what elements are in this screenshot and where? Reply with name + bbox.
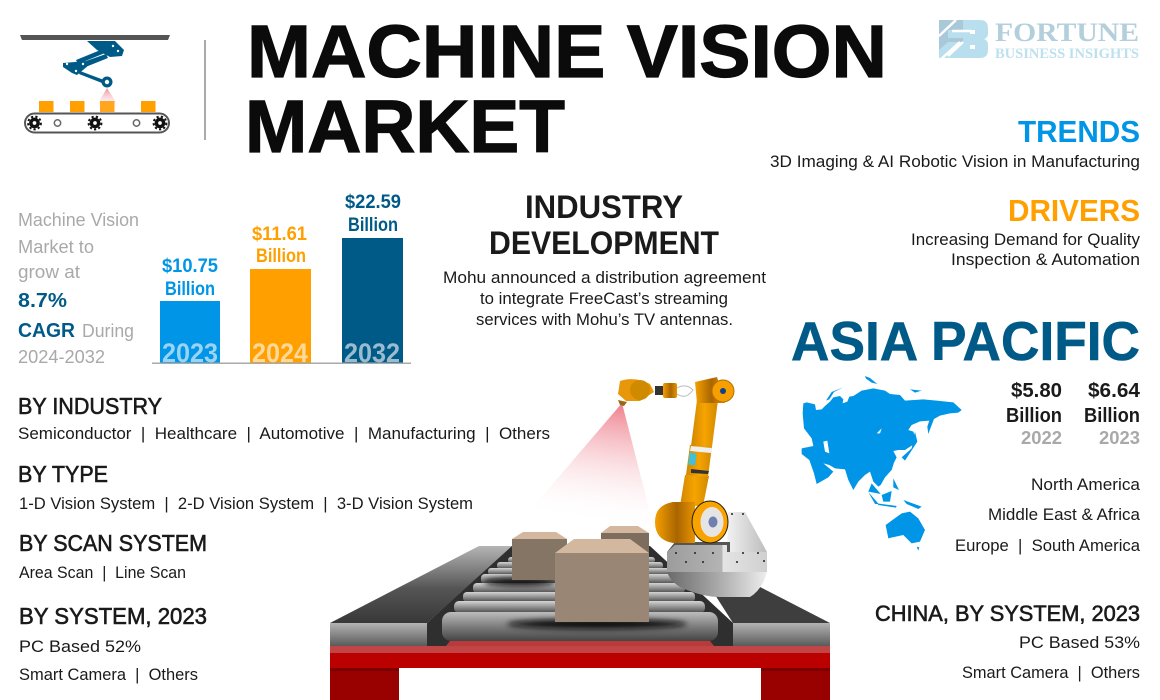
drivers [911,193,1140,269]
segment: by industry: BY INDUSTRY [18,393,162,419]
heading: Asia Pacific: ASIA PACIFIC [791,310,1140,372]
bar 2023: Billion [165,279,215,300]
robot arm [618,377,734,543]
industry development [443,189,766,329]
robot base [667,512,767,597]
title: MARKET [245,85,565,168]
other regions [955,475,1141,555]
CAGR text [18,210,139,367]
bar 2023: $10.75 [162,256,218,277]
other regions: North America [1031,475,1141,494]
segment: by scan system: BY SCAN SYSTEM [19,530,207,556]
bar 2024: $11.61 [252,224,307,245]
CAGR text: grow at [18,262,80,282]
trends [770,114,1140,171]
conveyor [330,546,830,646]
CAGR text: Market to [18,237,94,257]
bar 2024: 2024 [252,338,308,368]
bar 2023: 2023 [162,338,218,368]
regional values: 2023 [1099,428,1140,448]
map: Asia Pacific [802,376,962,551]
other regions: Middle East & Africa [988,505,1141,524]
trends: 3D Imaging & AI Robotic Vision in Manufacturing [770,152,1140,171]
segment: by type: BY TYPE [18,461,108,487]
bar 2032: Billion [348,215,398,236]
segment: by type [18,461,473,513]
segment: by scan system: Area Scan | Line Scan [19,563,186,582]
china by system [875,601,1140,682]
drivers: DRIVERS [1008,193,1140,228]
illustration: conveyor with robot arm [330,377,830,700]
regional values: $6.64 [1088,380,1141,402]
china by system: Smart Camera | Others [962,663,1140,682]
china by system: CHINA, BY SYSTEM, 2023 [875,601,1140,626]
segment: by industry [18,393,550,443]
regional values: Billion [1006,405,1062,427]
segment: by system: Smart Camera | Others [19,665,198,684]
trends: TRENDS [1018,114,1140,149]
bar 2032: $22.59 [345,192,401,213]
other regions: Europe | South America [955,536,1141,555]
segment: by industry: Semiconductor | Healthcare | Automotive | Manufacturing | Others [18,424,550,443]
industry development: Mohu announced a distribution agreement [443,268,766,287]
industry development: services with Mohu’s TV antennas. [476,310,733,329]
segment: by system [19,603,207,684]
CAGR text: During [82,321,134,341]
CAGR text: Machine Vision [18,210,139,230]
bar chart [152,192,411,368]
table frame [330,641,830,700]
logo: Fortune Business Insights: BUSINESS INSIGHTS [995,46,1139,62]
icon: robotic arm over conveyor [20,35,170,132]
drivers: Inspection & Automation [951,250,1140,269]
bar 2032: 2032 [344,338,400,368]
bar 2024 [250,224,311,368]
regional values: Billion [1084,405,1140,427]
regional values: 2022 [1021,428,1062,448]
china by system: PC Based 53% [1019,633,1140,652]
segment: by scan system [19,530,207,582]
segment: by type: 1-D Vision System | 2-D Vision System | 3-D Vision System [19,494,473,513]
logo: Fortune Business Insights [939,18,1139,62]
bar 2023 [160,256,220,368]
vision light cone [522,403,657,540]
regional values: $5.80 [1011,380,1062,402]
CAGR text: 2024-2032 [18,347,105,367]
logo: Fortune Business Insights: FORTUNE [995,18,1139,47]
CAGR text: CAGR [18,320,76,342]
segment: by system: BY SYSTEM, 2023 [19,603,207,629]
bar 2032 [342,192,403,368]
bar 2024: Billion [256,246,306,267]
boxes [512,526,649,622]
industry development: to integrate FreeCast’s streaming [480,289,728,308]
industry development: DEVELOPMENT [489,225,719,261]
CAGR text: 8.7% [18,290,67,312]
industry development: INDUSTRY [525,189,683,225]
drivers: Increasing Demand for Quality [911,230,1140,249]
title [245,10,887,168]
segment: by system: PC Based 52% [19,637,141,656]
title: MACHINE VISION [247,10,887,93]
regional values [1006,380,1141,448]
